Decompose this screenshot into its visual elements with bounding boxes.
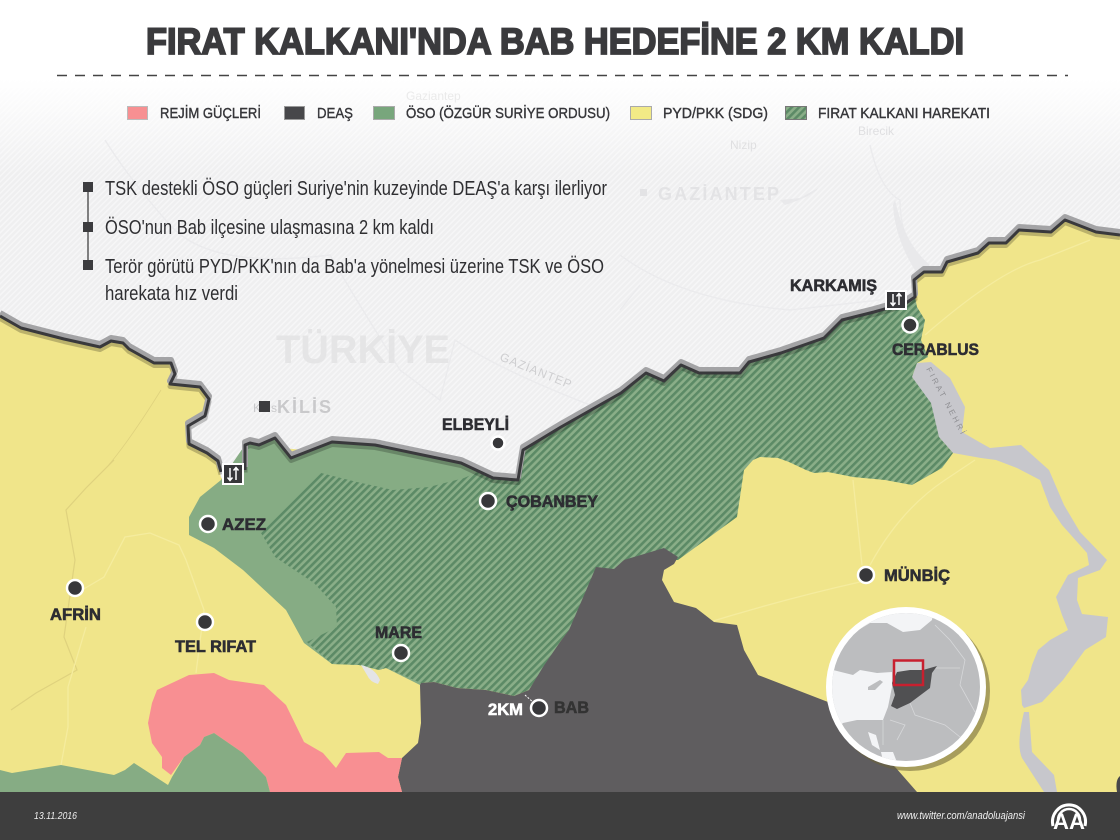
legend: deas (284, 105, 353, 122)
faded place names: KİLİS (277, 397, 333, 417)
icon: Kilis marker (259, 401, 270, 412)
faded place names: Birecik (858, 124, 895, 138)
icon: border gate east (886, 291, 906, 309)
legend: deas: DEAŞ (317, 105, 353, 122)
map: yellow roads and stream (11, 240, 1090, 765)
city labels: TEL RIFAT (175, 637, 257, 656)
city labels: AFRİN (50, 605, 101, 624)
2 km dashed distance (525, 695, 534, 703)
city labels: KARKAMIŞ (790, 276, 877, 295)
icon: AA logo: AA (1053, 809, 1085, 834)
faded place names: Gaziantep (406, 89, 461, 103)
map: DEAŞ region (398, 548, 917, 792)
footer bar (0, 792, 1120, 840)
faded place names: K (253, 401, 261, 415)
bullet text 3: harekata hız verdi (105, 283, 238, 305)
title: FIRAT KALKANI'NDA BAB HEDEFİNE 2 KM KALDI (146, 21, 964, 62)
border: Turkey-Syria line (0, 217, 1120, 482)
bullet list (83, 178, 607, 305)
map: ÖSO plain green region (north) (189, 438, 600, 685)
map: river Euphrates (912, 362, 1120, 792)
legend: rejim: REJİM GÜÇLERİ (160, 104, 261, 122)
city labels: MÜNBİÇ (884, 566, 950, 585)
city labels: BAB (554, 698, 589, 717)
city labels: CERABLUS (892, 340, 979, 359)
legend: pyd: PYD/PKK (SDG) (663, 105, 768, 122)
faded place names: Nizip (730, 138, 757, 152)
faded place names: GAZİANTEP (498, 350, 575, 392)
map: yellow PYD/PKK region (0, 220, 1120, 792)
faded place names: s (271, 401, 277, 415)
footer url: www.twitter.com/anadoluajansi (897, 810, 1025, 822)
city labels: AZEZ (222, 515, 266, 534)
map: white spot near Mare (361, 665, 380, 684)
faded place names: GAZİANTEP (658, 184, 782, 204)
city markers (67, 318, 918, 716)
bullet text 1: TSK destekli ÖSO güçleri Suriye'nin kuzeyinde DEAŞ'a karşı ilerliyor (105, 178, 607, 200)
city labels: 2KM (488, 700, 523, 719)
legend (128, 104, 990, 122)
map: Fırat Kalkanı hatched region (261, 297, 953, 696)
footer date: 13.11.2016 (34, 810, 77, 822)
city labels: ELBEYLİ (442, 415, 509, 434)
bullet text 2: ÖSO'nun Bab ilçesine ulaşmasına 2 km kaldı (105, 217, 434, 239)
faded place names: TÜRKİYE (276, 327, 450, 372)
legend: firat kalkani: FIRAT KALKANI HAREKATI (818, 105, 990, 122)
background: Turkey land area (0, 0, 1120, 500)
city labels: MARE (375, 623, 422, 642)
bullet text 3: Terör görütü PYD/PKK'nın da Bab'a yönelmesi üzerine TSK ve ÖSO (105, 256, 604, 278)
city labels (50, 276, 979, 719)
locator inset map (820, 600, 990, 771)
icon: border gate west (223, 464, 243, 484)
legend: rejim (128, 104, 261, 122)
map: river Euphrates: FIRAT NEHRİ (924, 366, 968, 438)
map: ÖSO green region (south) (0, 733, 270, 792)
faded place names (253, 89, 895, 417)
legend: oso: ÖSO (ÖZGÜR SURİYE ORDUSU) (406, 104, 610, 122)
city labels: ÇOBANBEY (506, 492, 599, 511)
map: rejim red region (148, 673, 402, 792)
